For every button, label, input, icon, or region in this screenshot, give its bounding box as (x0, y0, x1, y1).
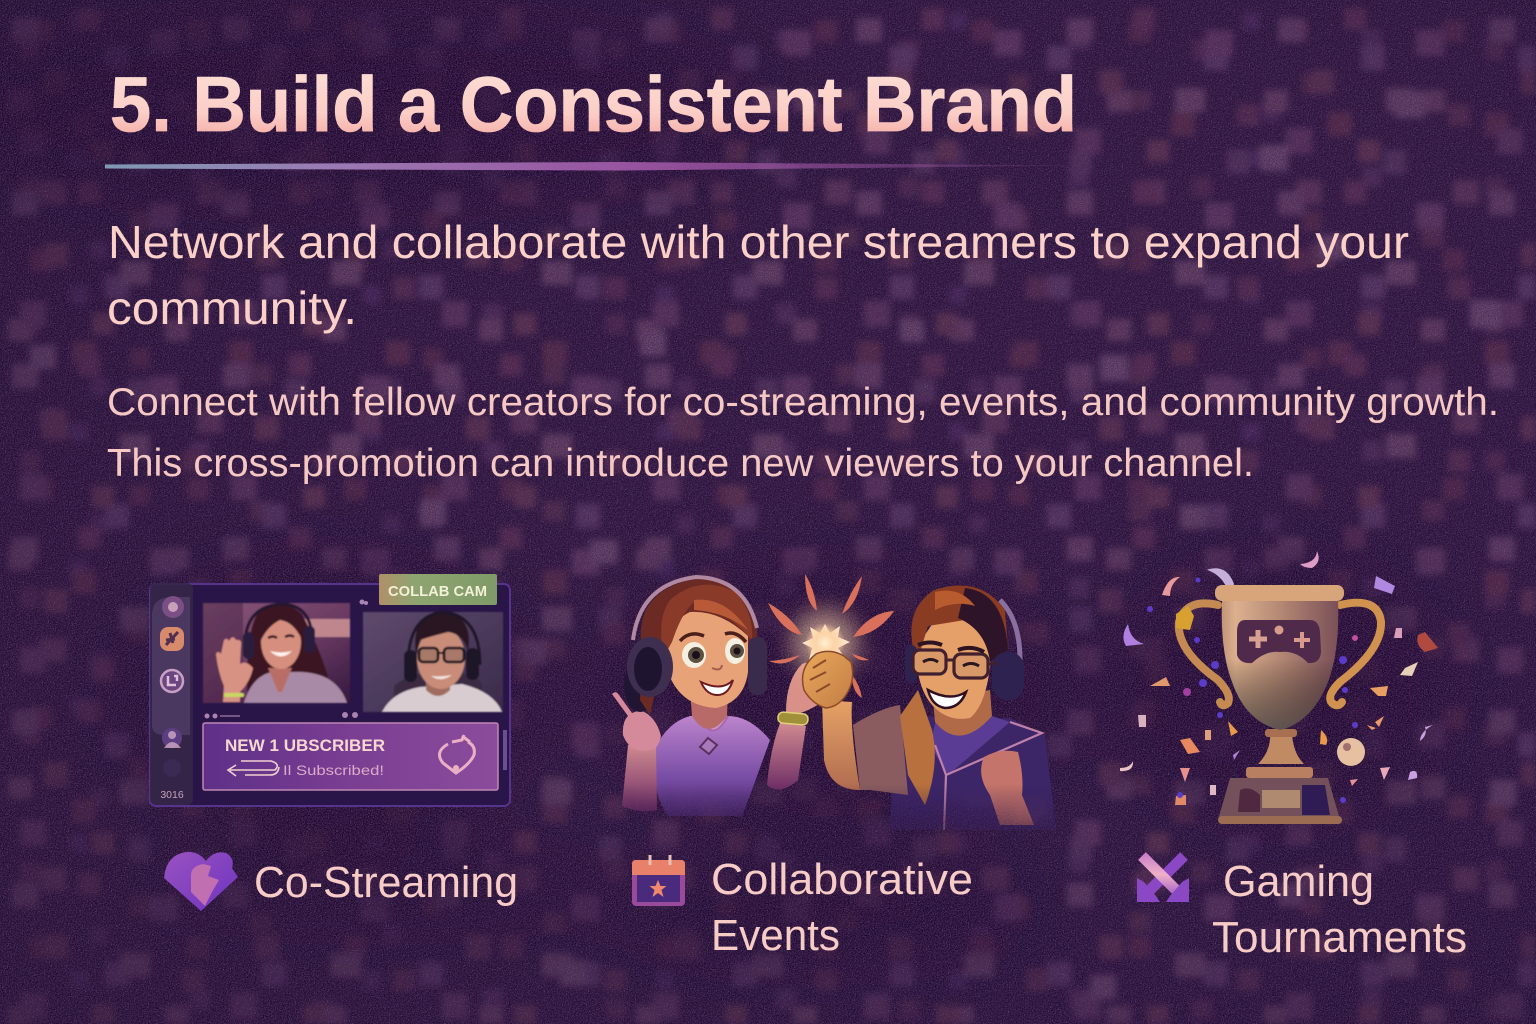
new subscriber banner (203, 723, 498, 790)
boy neck (933, 690, 992, 736)
label: collaborative events (632, 855, 973, 960)
fist (802, 651, 853, 708)
small status dots (204, 600, 507, 770)
girl left arm and hand (622, 745, 657, 811)
label: gaming tournaments: Tournaments (1212, 913, 1467, 962)
subtitle text block: Network and collaborate with other streamers to expand your (108, 216, 1409, 268)
icon: heart with silhouette (164, 852, 238, 911)
boy hoodie (890, 712, 1056, 830)
girl torso (654, 716, 770, 816)
description text block: Connect with fellow creators for co-streaming, events, and community growth. (107, 381, 1499, 424)
collab cam tag (379, 574, 497, 605)
collab cam tag: COLLAB CAM (388, 583, 487, 600)
spark burst (768, 574, 894, 698)
illustration: trophy with confetti (1120, 551, 1438, 824)
boy glasses and smile (913, 650, 946, 674)
trophy handles (1176, 603, 1381, 705)
description text block (107, 381, 1499, 485)
girl right arm and hand (767, 723, 806, 789)
description text block: This cross-promotion can introduce new viewers to your channel. (107, 442, 1254, 485)
boy raised arm (822, 700, 860, 790)
icon: crossed swords (1137, 856, 1189, 902)
subtitle text block: community. (107, 282, 357, 334)
label: gaming tournaments (1137, 856, 1467, 962)
new subscriber banner: NEW 1 UBSCRIBER (225, 736, 385, 755)
girl eyes and mouth (682, 642, 706, 668)
illustration: co-streaming overlay (150, 574, 510, 806)
girl headphones (633, 577, 757, 640)
sidebar: 3016 (160, 789, 184, 801)
boy sleeve (853, 705, 908, 795)
confetti (1120, 551, 1438, 805)
subtitle text block (107, 216, 1409, 334)
boy long hair (900, 690, 935, 805)
boy head (916, 618, 992, 719)
label: gaming tournaments: Gaming (1223, 857, 1374, 906)
label: collaborative events: Collaborative (711, 855, 973, 904)
title underline (105, 162, 1080, 170)
label: co-streaming: Co-Streaming (254, 858, 518, 907)
trophy cup (1215, 585, 1344, 730)
boy streamer (822, 586, 1056, 830)
girl back hair and headphone (624, 670, 654, 712)
sidebar (150, 583, 193, 805)
girl face (668, 612, 748, 708)
video tile: man with glasses (363, 612, 503, 712)
video tile: woman waving (203, 603, 350, 703)
title: 5. Build a Consistent Brand (110, 60, 1077, 148)
boy headphones (1000, 600, 1020, 660)
icon: calendar with star (632, 855, 685, 906)
new subscriber banner: Il Subscribed! (283, 762, 384, 778)
girl neck (690, 701, 728, 729)
trophy base (1218, 729, 1342, 824)
girl streamer (612, 577, 825, 816)
illustration: two streamers fist bump (612, 574, 1056, 830)
label: collaborative events: Events (711, 911, 840, 960)
boy fist at chest (981, 751, 1034, 825)
label: co-streaming (164, 852, 518, 911)
